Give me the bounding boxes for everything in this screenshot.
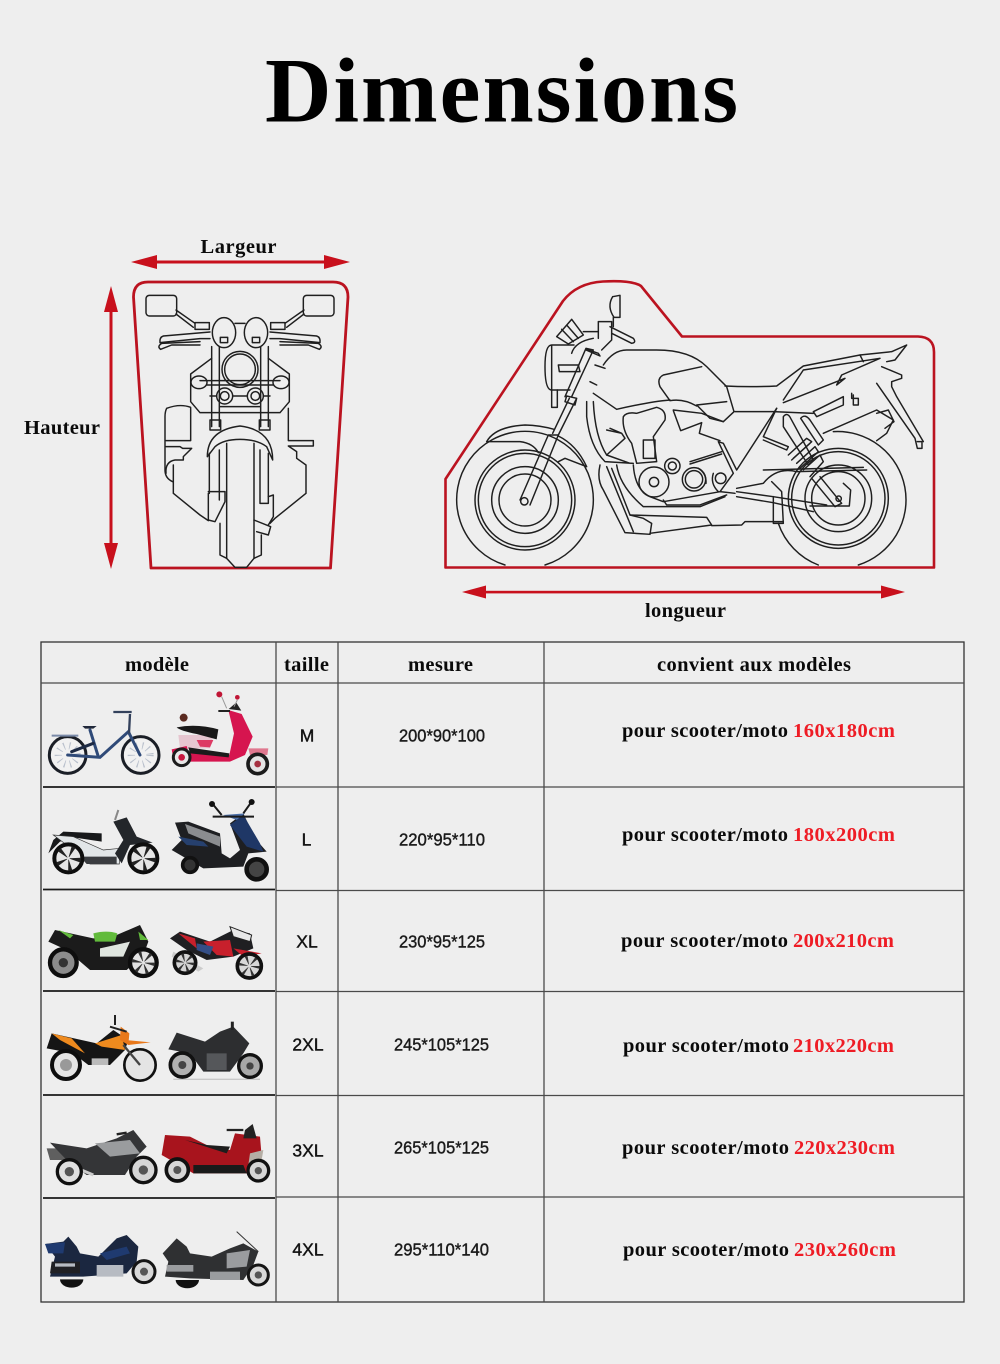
label: longueur: longueur [645, 600, 726, 622]
row M [49, 691, 895, 774]
label: Largeur: Largeur [200, 236, 276, 258]
row XL [48, 925, 894, 978]
orange dirt bike [47, 1015, 156, 1081]
title: Dimensions [265, 40, 738, 142]
row 2XL [47, 1015, 894, 1081]
fit M: pour scooter/moto [622, 720, 788, 742]
green sport bike [48, 925, 157, 976]
grey touring bike [47, 1130, 156, 1184]
red scooter [172, 691, 268, 774]
side cover outline [446, 281, 934, 568]
measure M: 200*90*100 [399, 726, 485, 746]
size L: L [302, 830, 312, 850]
arrow: width [131, 255, 350, 269]
row 4XL [45, 1232, 896, 1288]
measure L: 220*95*110 [399, 830, 485, 850]
size M: M [300, 726, 314, 746]
bicycle [49, 712, 159, 773]
fit 3XL: pour scooter/moto [622, 1137, 789, 1159]
silver tourer [163, 1232, 268, 1288]
row L [48, 799, 895, 879]
table grid [41, 642, 964, 1302]
front cover outline [134, 282, 348, 568]
dark scooter [172, 799, 267, 879]
fit L: 180x200cm [793, 824, 895, 846]
fit 4XL [623, 1239, 896, 1261]
table header: convient aux modèles [657, 654, 851, 676]
fit 4XL: pour scooter/moto [623, 1239, 789, 1261]
fit 2XL: 210x220cm [793, 1035, 894, 1057]
fit L: pour scooter/moto [622, 824, 788, 846]
blue tourer [45, 1235, 155, 1288]
fit 4XL: 230x260cm [794, 1239, 896, 1261]
arrow: length [462, 586, 905, 598]
measure 2XL: 245*105*125 [394, 1034, 489, 1054]
table: sizes [41, 642, 964, 1302]
label: Hauteur: Hauteur [24, 417, 100, 439]
red sport bike [170, 927, 262, 978]
black naked bike [168, 1022, 261, 1079]
size 4XL: 4XL [292, 1240, 324, 1260]
fit 2XL [623, 1035, 894, 1057]
size XL: XL [296, 932, 318, 952]
side motorcycle line art [457, 295, 923, 565]
row 3XL [47, 1124, 895, 1184]
table header: modèle [125, 654, 189, 676]
moped [48, 810, 157, 872]
size 2XL: 2XL [292, 1034, 324, 1054]
red maxi scooter [162, 1124, 269, 1181]
fit 3XL: 220x230cm [794, 1137, 895, 1159]
fit XL [621, 930, 894, 952]
front motorcycle line art [146, 295, 334, 567]
size 3XL: 3XL [292, 1140, 324, 1160]
fit M: 160x180cm [793, 720, 895, 742]
diagram: front view motorcycle [134, 282, 348, 568]
fit XL: 200x210cm [793, 930, 894, 952]
measure 4XL: 295*110*140 [394, 1240, 489, 1260]
fit 2XL: pour scooter/moto [623, 1035, 789, 1057]
table header: mesure [408, 654, 473, 676]
fit M [622, 720, 895, 742]
measure 3XL: 265*105*125 [394, 1138, 489, 1158]
fit L [622, 824, 895, 846]
table header: taille [284, 654, 329, 676]
table header [125, 654, 851, 676]
diagram: side view motorcycle [446, 281, 934, 568]
measure XL: 230*95*125 [399, 932, 485, 952]
arrow: height [104, 286, 118, 569]
fit 3XL [622, 1137, 895, 1159]
fit XL: pour scooter/moto [621, 930, 788, 952]
